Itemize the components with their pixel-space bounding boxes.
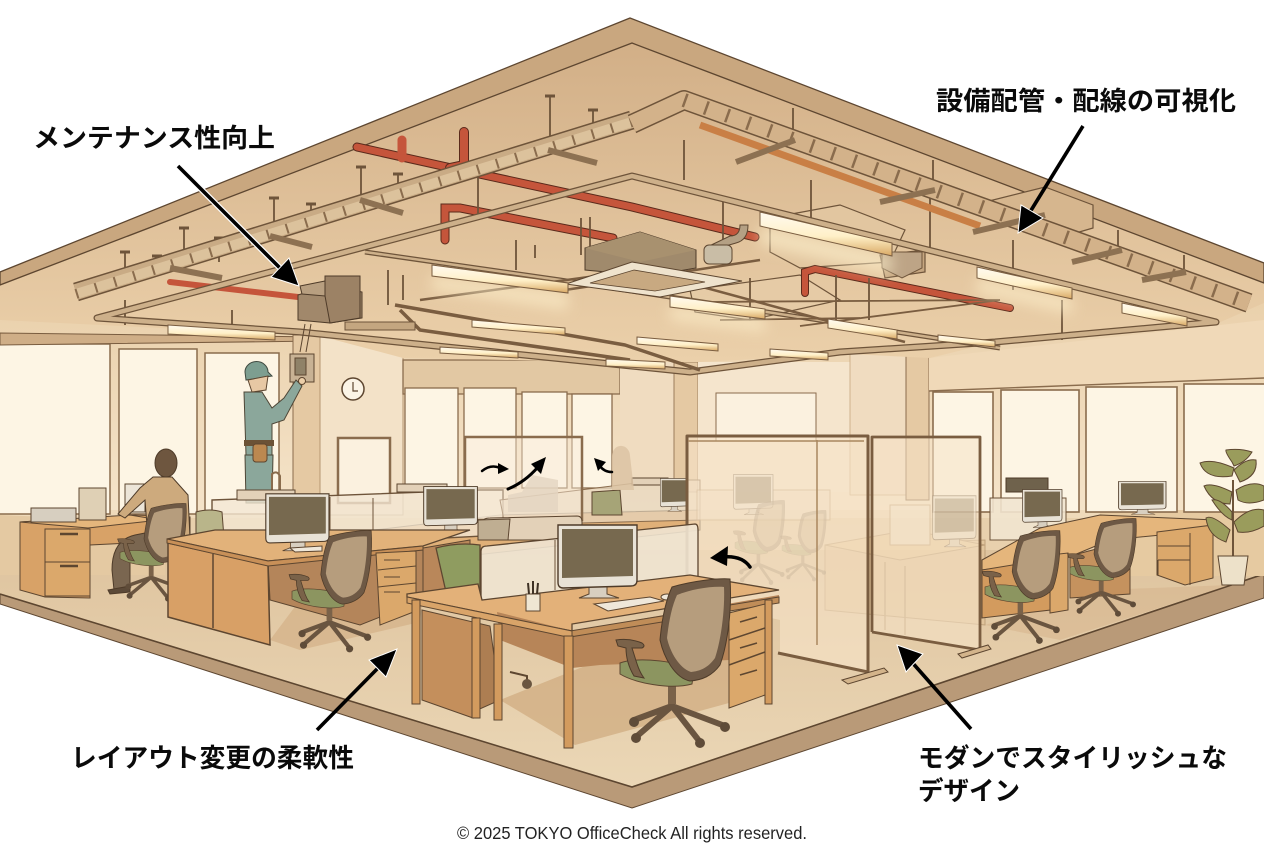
ceiling light glow [432, 225, 1072, 332]
glass partition panels [687, 436, 991, 684]
small layout arrows [482, 457, 750, 567]
pipe: left run [170, 282, 298, 297]
cable tray: right [632, 100, 1249, 303]
callout arrow: visible piping [1018, 126, 1083, 233]
arrow: up right [508, 457, 546, 489]
keyboard [290, 546, 322, 552]
rear desk tops [375, 510, 700, 560]
monitor on left desk [266, 494, 329, 551]
glass partition far [465, 437, 582, 520]
wall beam [0, 333, 320, 345]
middle row desks [167, 437, 700, 645]
walls [0, 283, 1264, 576]
keyboard and mouse [594, 597, 664, 611]
arrow: curved left [710, 546, 750, 567]
arrow: up left [594, 458, 612, 472]
junction box [298, 276, 415, 352]
rear partition [481, 524, 698, 615]
right windows [933, 384, 1264, 512]
pipe: upper run [357, 132, 755, 237]
foreground desk [407, 524, 779, 748]
cable tray: left [76, 120, 632, 294]
panel: right glass [872, 437, 980, 650]
callout arrow: maintenance [178, 166, 299, 286]
desk [20, 515, 190, 598]
left desk chair [289, 531, 372, 652]
right wall upper [929, 320, 1264, 391]
back windows [403, 360, 620, 488]
duct boxes [690, 187, 1093, 320]
ceiling hanger rods [125, 96, 1184, 340]
floor shadows [500, 640, 770, 745]
footer copyright: © 2025 TOKYO OfficeCheck All rights reserved. [457, 823, 807, 843]
right pedestal [729, 604, 765, 708]
panel: left glass [688, 436, 868, 672]
right office chairs [1068, 518, 1136, 617]
hanging frame [97, 176, 1216, 372]
left pedestal [422, 610, 473, 718]
label: layout flexibility: レイアウト変更の柔軟性 [71, 743, 354, 773]
callout arrow: design [897, 645, 971, 729]
legs [412, 600, 772, 748]
rear glass partitions [212, 490, 503, 550]
floor slab [0, 500, 1264, 808]
green chair [436, 544, 480, 592]
ceiling lights [168, 212, 1187, 369]
back-left workstation with seated person [20, 449, 190, 598]
clock [342, 378, 364, 400]
column left [293, 335, 320, 515]
right workstations [982, 478, 1215, 618]
foreground chair [616, 579, 731, 748]
seated person chair [118, 503, 186, 602]
pipe: right run [805, 269, 1010, 308]
far monitors [660, 478, 688, 511]
callout arrow: layout flexibility [317, 649, 397, 730]
window band: left [0, 344, 279, 514]
rear partition centre [482, 516, 582, 540]
label: visible piping: 設備配管・配線の可視化 [936, 86, 1236, 116]
label: stylish design: モダンでスタイリッシュな [918, 743, 1227, 773]
far desks right of centre [500, 480, 700, 525]
person [112, 530, 160, 590]
ceiling [0, 18, 1264, 362]
ceiling cassette AC [566, 225, 922, 297]
arrow: small right [482, 463, 509, 474]
caster [510, 672, 527, 682]
worker on ladder [244, 354, 314, 503]
label: maintenance: メンテナンス性向上 [33, 123, 275, 153]
glass partition behind scene content [697, 475, 985, 635]
door frame [338, 438, 390, 503]
pipe: middle run [445, 208, 613, 240]
red pipes [170, 132, 1010, 308]
pencil cup [526, 594, 540, 611]
main monitor [558, 525, 637, 598]
pedestal [376, 551, 416, 625]
desk top [407, 575, 779, 631]
label: stylish design: デザイン [918, 776, 1020, 806]
left desk [167, 530, 470, 561]
desk modesty [497, 595, 779, 668]
plant [1200, 449, 1264, 585]
faint desks behind panels [825, 540, 985, 625]
whiteboard [716, 393, 816, 441]
printer and files [31, 508, 76, 522]
